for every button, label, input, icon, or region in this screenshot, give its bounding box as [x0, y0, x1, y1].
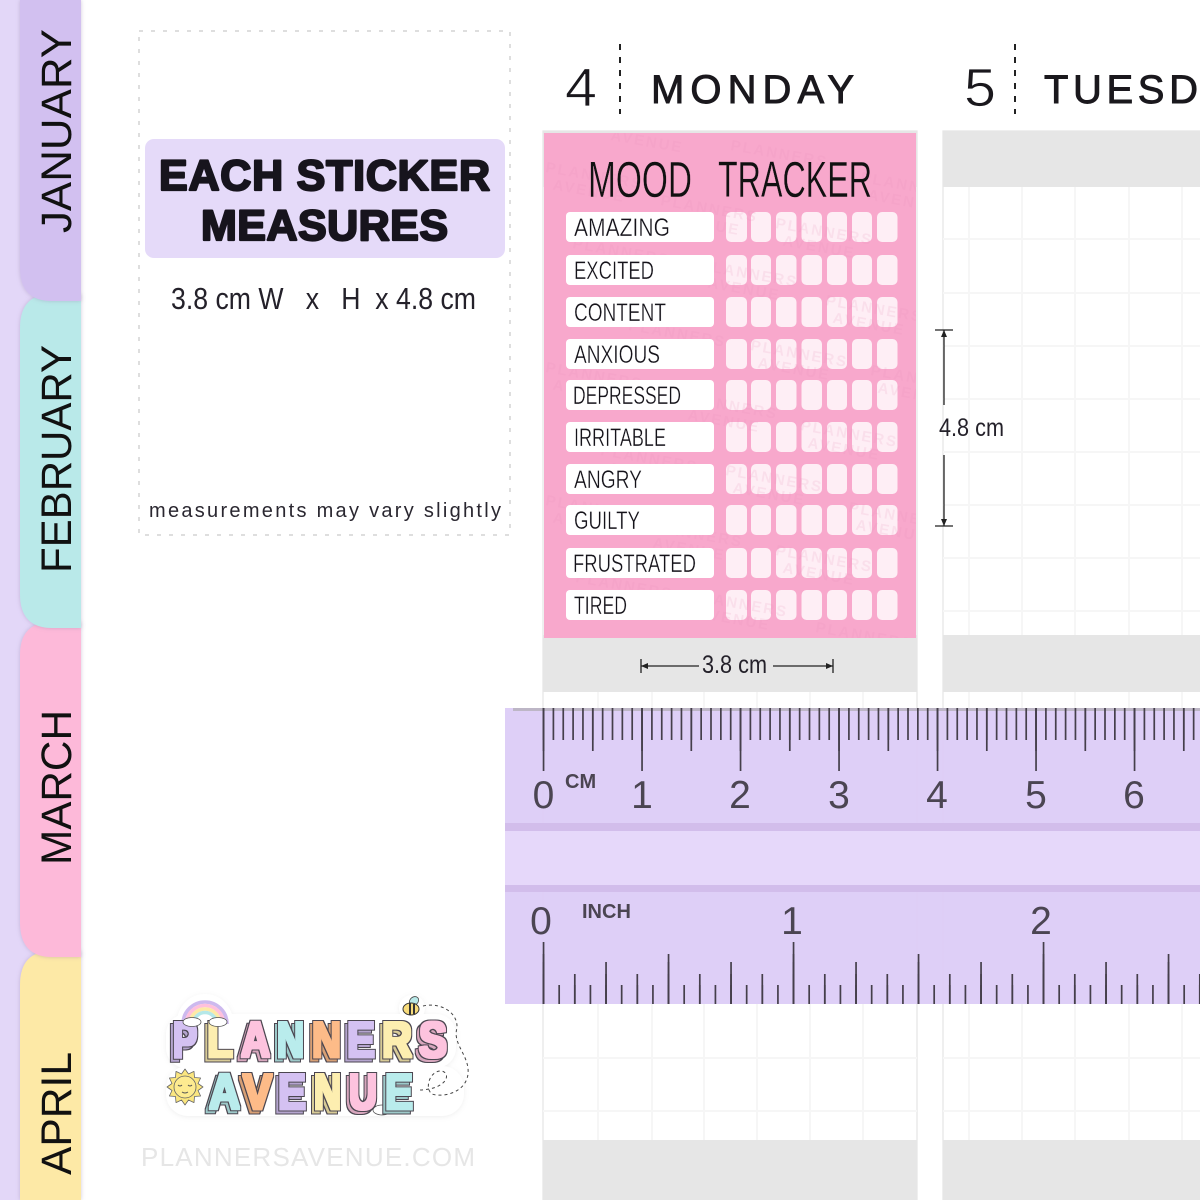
- centimetre labels: CM: [565, 771, 596, 793]
- row: excited: EXCITED: [574, 257, 654, 285]
- height dimension arrow: [935, 330, 1004, 526]
- watermarks: AVENUE: [551, 377, 627, 406]
- logo line: avenue: U: [349, 1064, 377, 1120]
- logo line: avenue: N: [314, 1064, 341, 1120]
- watermarks: PLANNERS: [724, 462, 824, 496]
- icon: rainbow: [183, 1002, 227, 1024]
- heading: each sticker measures: MEASURES: [201, 202, 448, 250]
- watermarks: AVENUE: [781, 560, 857, 589]
- watermarks: PLANNERS: [799, 417, 899, 451]
- day header: 5 tuesday: 5: [964, 58, 996, 118]
- centimetre labels: 4: [926, 774, 948, 817]
- watermarks: AVENUE: [854, 517, 930, 546]
- logo line: planners: R: [382, 1012, 412, 1068]
- watermarks: AVENUE: [831, 310, 907, 339]
- watermarks: AVENUE: [706, 275, 782, 304]
- day header: 5 tuesday: [964, 44, 1200, 118]
- width dimension arrow: [641, 651, 833, 679]
- row: content: CONTENT: [574, 299, 666, 327]
- watermarks: AVENUE: [606, 460, 682, 489]
- centimetre labels: 6: [1123, 774, 1145, 817]
- watermarks: PLANNERS: [599, 442, 699, 476]
- centimetre labels: 0: [533, 774, 554, 817]
- inch labels: 2: [1030, 900, 1052, 943]
- row: irritable: IRRITABLE: [574, 424, 666, 452]
- watermarks: PLANNERS: [659, 192, 759, 226]
- centimetre labels: 5: [1025, 774, 1047, 817]
- row: depressed: DEPRESSED: [573, 382, 681, 410]
- tab: february: [20, 294, 81, 628]
- watermarks: PLANNERS: [749, 337, 849, 371]
- width dimension arrow: 3.8 cm: [702, 651, 767, 679]
- row: anxious: ANXIOUS: [574, 341, 660, 369]
- logo line: planners: A: [241, 1012, 270, 1068]
- logo line: planners: N: [277, 1012, 304, 1068]
- day header: 4 monday: [565, 44, 854, 118]
- dimensions text: 3.8 cm W x H x 4.8 cm: [171, 281, 476, 316]
- watermarks: AVENUE: [581, 587, 657, 616]
- heading: each sticker measures: [145, 139, 505, 258]
- watermarks: AVENUE: [634, 335, 710, 364]
- watermarks: PLANNERS: [699, 257, 799, 291]
- row: guilty: [566, 505, 714, 535]
- tab: march: MARCH: [33, 710, 81, 865]
- watermarks: PLANNERS: [627, 317, 727, 351]
- watermarks: AVENUE: [756, 355, 832, 384]
- logo line: avenue: [209, 1064, 413, 1120]
- logo line: planners: P: [173, 1012, 197, 1068]
- watermarks: PLANNERS: [544, 359, 644, 393]
- watermarks: AVENUE: [686, 407, 762, 436]
- centimetre labels: 2: [729, 774, 751, 817]
- row: tired: [566, 590, 714, 620]
- tracker title: MOOD: [588, 151, 692, 208]
- height dimension arrow: 4.8 cm: [939, 414, 1004, 442]
- watermarks: PLANNERS: [824, 292, 924, 326]
- row: angry: [566, 464, 714, 494]
- watermarks: AVENUE: [609, 127, 685, 157]
- watermarks: [726, 212, 898, 620]
- tab: april: APRIL: [33, 1052, 81, 1175]
- row: excited: [566, 255, 714, 285]
- watermarks: AVENUE: [731, 480, 807, 509]
- watermarks: PLANNERS: [814, 619, 914, 653]
- watermarks: AVENUE: [781, 233, 857, 262]
- planner page column 1: [543, 131, 917, 1200]
- watermarks: AVENUE: [696, 605, 772, 634]
- watermarks: AVENUE: [551, 510, 627, 539]
- dotted flight path: [418, 1005, 468, 1095]
- watermarks: PLANNERS: [859, 169, 959, 203]
- watermarks: PLANNERS: [869, 362, 969, 396]
- disclaimer: measurements may vary slightly: [149, 500, 501, 522]
- tab: january: [20, 0, 81, 301]
- row: tired: TIRED: [574, 592, 627, 620]
- sidebar background: [0, 0, 81, 1200]
- day header: 4 monday: 4: [565, 58, 597, 118]
- day header: 4 monday: MONDAY: [651, 68, 854, 112]
- watermarks: PLANNERS: [729, 137, 829, 171]
- watermarks: PLANNERS: [571, 235, 671, 269]
- icon: clouds: [183, 1018, 391, 1115]
- tracker title: [588, 151, 872, 208]
- tab: february: FEBRUARY: [33, 345, 81, 573]
- logo: planners avenue: [166, 994, 468, 1120]
- inch labels: [530, 900, 1052, 943]
- row: frustrated: FRUSTRATED: [573, 550, 696, 578]
- logo line: avenue: V: [243, 1064, 273, 1120]
- watermarks: PLANNERS: [774, 215, 874, 249]
- tab: january: JANUARY: [33, 29, 81, 233]
- watermarks: PLANNERS: [644, 517, 744, 551]
- logo line: avenue: A: [209, 1064, 240, 1120]
- watermarks: AVENUE: [551, 177, 627, 206]
- watermarks: AVENUE: [666, 210, 742, 239]
- watermarks: PLANNERS: [574, 569, 674, 603]
- watermarks: PLANNERS: [847, 499, 947, 533]
- watermarks: AVENUE: [578, 253, 654, 282]
- tab: march: [20, 622, 81, 957]
- inch ticks: [543, 973, 1200, 994]
- row: angry: ANGRY: [574, 466, 642, 494]
- logo sticker backing: [166, 994, 464, 1116]
- inch labels: INCH: [582, 901, 631, 923]
- tab: april: [20, 951, 81, 1200]
- centimetre labels: 3: [828, 774, 850, 817]
- watermarks: AVENUE: [876, 380, 952, 409]
- planner page column 2: [943, 131, 1200, 1200]
- logo line: avenue: E: [278, 1064, 306, 1120]
- watermarks: PLANNERS: [544, 492, 644, 526]
- icon: bee: [403, 995, 420, 1015]
- icon: sun: [167, 1069, 203, 1105]
- logo line: planners: N: [312, 1012, 341, 1068]
- panel: mood tracker sticker: [544, 133, 916, 638]
- watermarks: AVENUE: [806, 435, 882, 464]
- inch labels: 1: [781, 900, 803, 943]
- watermarks: AVENUE: [866, 187, 942, 216]
- logo line: planners: E: [347, 1012, 375, 1068]
- watermarks: PLANNERS: [679, 389, 779, 423]
- watermarks: PLANNERS: [544, 159, 644, 193]
- centimetre labels: 1: [631, 774, 653, 817]
- row: guilty: GUILTY: [574, 507, 640, 535]
- website url: PLANNERSAVENUE.COM: [141, 1142, 475, 1172]
- logo line: avenue: E: [385, 1064, 413, 1120]
- logo line: planners: [173, 1012, 447, 1068]
- check boxes: [726, 212, 898, 620]
- panel: measurement note: [139, 31, 510, 535]
- row: amazing: AMAZING: [574, 214, 670, 242]
- centimetre labels: [533, 771, 1145, 817]
- ruler: [505, 708, 1200, 1004]
- heading: each sticker measures: EACH STICKER: [159, 152, 490, 200]
- watermarks: PLANNERS: [689, 587, 789, 621]
- watermarks: PLANNERS: [774, 542, 874, 576]
- inch labels: 0: [530, 900, 552, 943]
- tracker title: TRACKER: [718, 151, 872, 208]
- logo line: planners: S: [419, 1012, 447, 1068]
- watermarks: AVENUE: [651, 535, 727, 564]
- centimetre ticks: [543, 724, 1200, 740]
- logo line: planners: L: [207, 1012, 233, 1068]
